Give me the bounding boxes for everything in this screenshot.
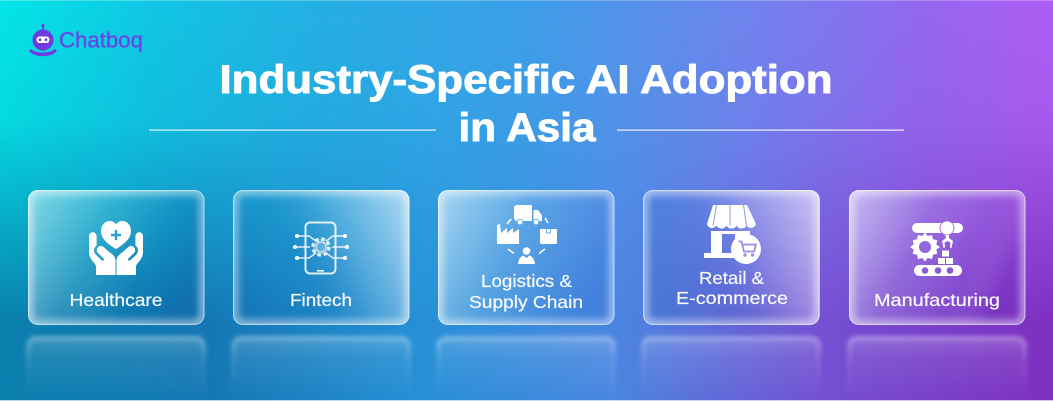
title: Industry-Specific AI Adoption (220, 58, 832, 102)
label: Retail & E-commerce: Retail & (699, 268, 764, 288)
reflection: card 4 (643, 338, 819, 398)
title: in Asia (458, 106, 596, 150)
icon: phone with circuit gear (293, 222, 349, 274)
panel: Healthcare (28, 190, 204, 325)
icon: heart in hands (89, 221, 143, 275)
logo wordmark: Chatboq (59, 28, 143, 52)
label: Logistics & Supply Chain: Logistics & (481, 271, 572, 291)
icon: supply chain cycle (497, 205, 557, 264)
label: Retail & E-commerce: E-commerce (676, 288, 788, 308)
label: Logistics & Supply Chain (469, 271, 583, 312)
icon: robot logo (29, 24, 57, 56)
reflection: card 5 (849, 338, 1025, 398)
reflection: card 2 (233, 338, 409, 398)
icon: shop with cart (704, 205, 761, 264)
panel: Manufacturing (849, 190, 1026, 325)
label: Retail & E-commerce (676, 268, 788, 308)
title (220, 58, 832, 150)
reflection: card 1 (28, 338, 204, 398)
panel: Retail & E-commerce (643, 190, 820, 325)
label: Fintech: Fintech (290, 290, 352, 310)
icon: robot arm and conveyor (910, 221, 963, 276)
label: Healthcare: Healthcare (70, 290, 162, 310)
panel: Fintech (233, 190, 410, 325)
label: Manufacturing: Manufacturing (874, 290, 1000, 310)
label: Logistics & Supply Chain: Supply Chain (469, 292, 583, 312)
panel: Logistics & Supply Chain (438, 190, 614, 325)
reflection: card 3 (438, 338, 614, 398)
logo: Chatboq (29, 24, 143, 56)
